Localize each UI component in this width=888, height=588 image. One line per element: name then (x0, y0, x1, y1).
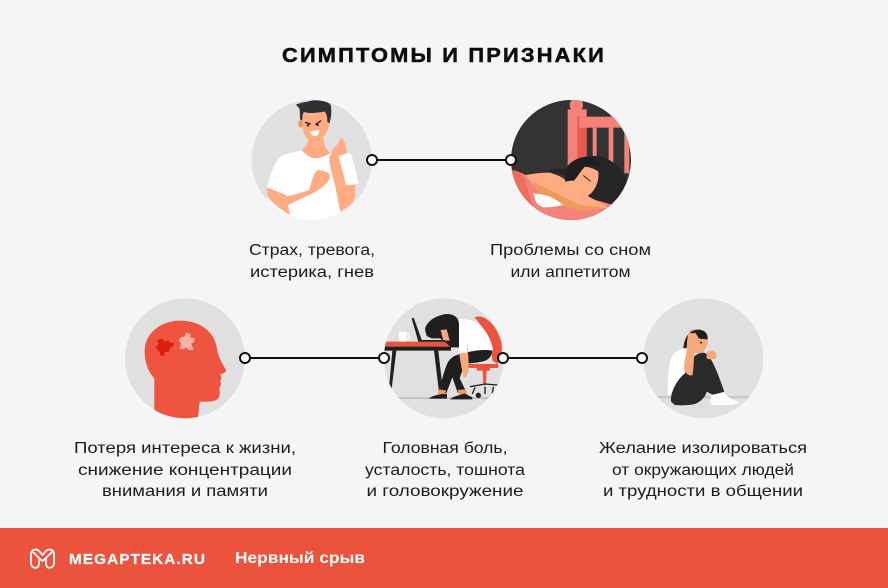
caption: fear (249, 242, 375, 281)
icon: isolated woman hugging knees (643, 298, 763, 418)
caption: headache: и головокружение (366, 483, 524, 500)
icon: logo (31, 550, 54, 568)
caption: fear: истерика, гнев (250, 264, 374, 281)
icon: dark puzzle piece (156, 339, 174, 356)
footer title: Нервный срыв (235, 550, 365, 567)
caption: loss of interest: внимания и памяти (102, 483, 268, 500)
connector: bottom left (240, 353, 389, 363)
caption: sleep: Проблемы со сном (490, 242, 651, 259)
title: СИМПТОМЫ И ПРИЗНАКИ (282, 45, 606, 67)
icon: head with puzzle pieces (125, 298, 245, 420)
icon: anxious man (252, 100, 372, 223)
caption: sleep: или аппетитом (510, 264, 630, 281)
caption: isolation: от окружающих людей (612, 462, 794, 479)
caption: loss of interest: снижение концентрации (78, 462, 292, 479)
caption: isolation: Желание изолироваться (599, 440, 807, 457)
footer bar (0, 528, 888, 588)
caption: isolation: и трудности в общении (603, 483, 803, 500)
icon: light puzzle piece (179, 333, 195, 350)
icon: sleeping woman (510, 98, 633, 222)
caption: loss of interest: Потеря интереса к жизни, (74, 440, 296, 457)
caption: sleep (490, 242, 651, 281)
caption: headache (365, 440, 525, 500)
caption: headache: усталость, тошнота (365, 462, 525, 479)
caption: headache: Головная боль, (382, 440, 508, 457)
connector: bottom right (498, 353, 647, 363)
logo text: MEGAPTEKA.RU (69, 552, 206, 568)
connector: top row (367, 155, 516, 165)
caption: fear: Страх, тревога, (249, 242, 375, 259)
caption: loss of interest (74, 440, 296, 500)
caption: isolation (599, 440, 807, 500)
icon: exhausted woman at desk (384, 298, 504, 418)
